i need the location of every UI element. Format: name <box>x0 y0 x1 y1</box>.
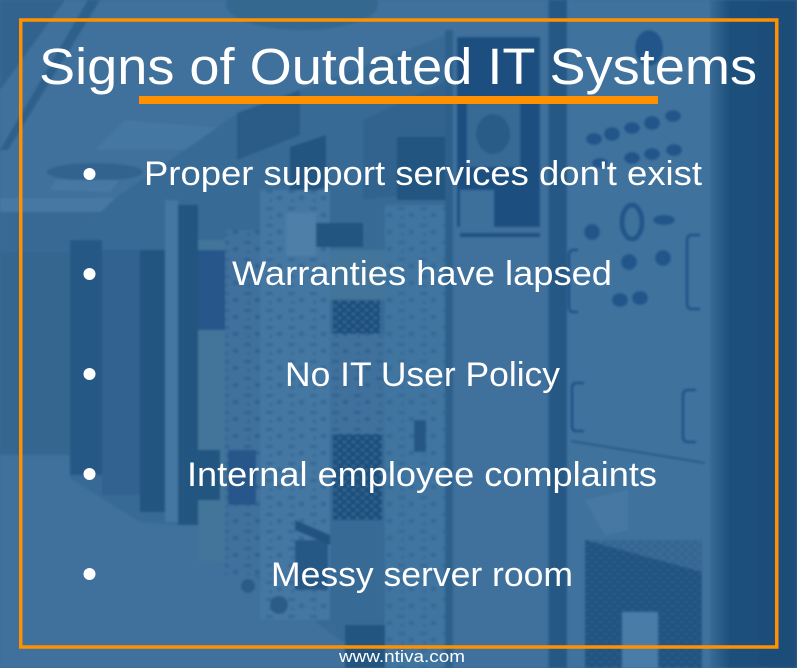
item 1: support services: Proper support services don't exist <box>144 155 703 193</box>
dark divider <box>549 0 567 668</box>
right dark band <box>710 0 797 668</box>
item 5: server room: Messy server room <box>271 556 573 594</box>
title: Signs of Outdated IT Systems <box>39 38 757 95</box>
right rack panel <box>567 0 715 668</box>
item 3: user policy: No IT User Policy <box>285 356 560 394</box>
mid rack <box>445 0 547 668</box>
item 4: employee complaints: Internal employee complaints <box>187 456 657 494</box>
bullet list <box>84 155 703 594</box>
item 2: warranties <box>84 255 612 293</box>
title underline <box>139 96 658 104</box>
item 5: server room <box>84 556 573 594</box>
item 3: user policy <box>84 356 560 394</box>
item 2: warranties: Warranties have lapsed <box>232 255 612 293</box>
floor casters <box>241 579 255 593</box>
website footer: www.ntiva.com <box>338 647 465 666</box>
